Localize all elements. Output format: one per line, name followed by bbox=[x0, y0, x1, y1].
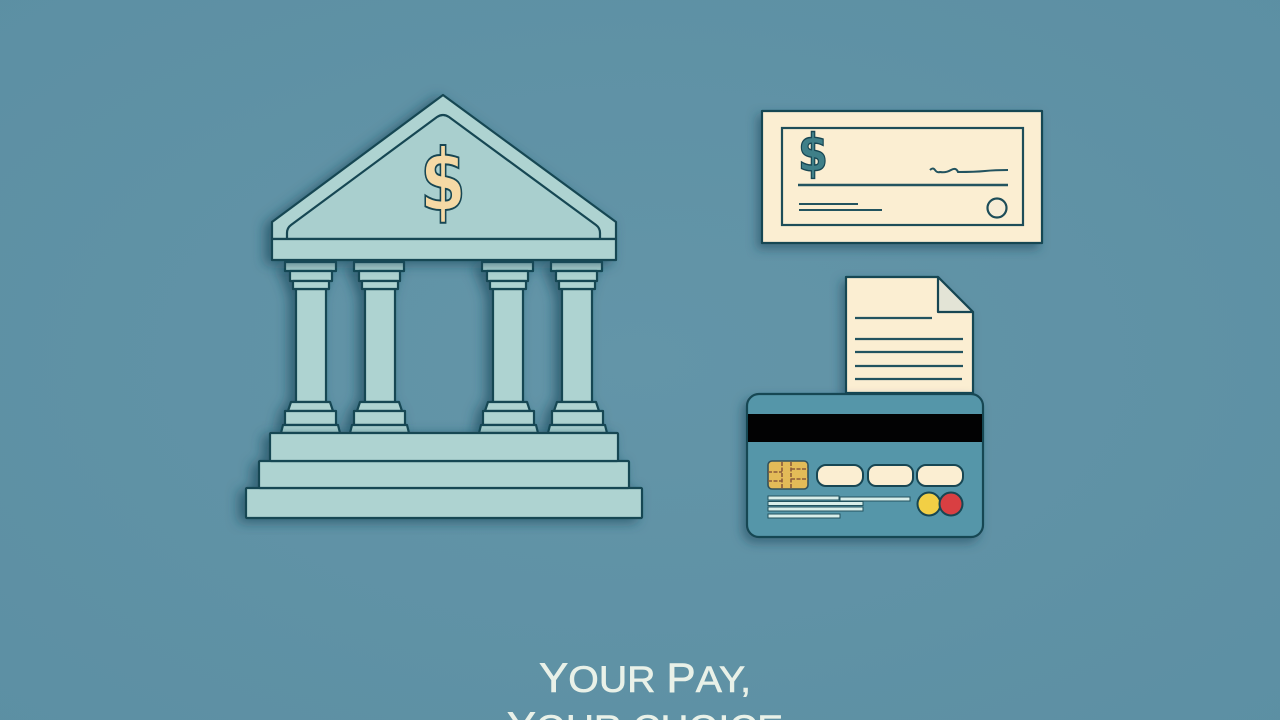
icon: dollar sign on pediment: $ bbox=[420, 131, 466, 231]
card chip bbox=[768, 461, 808, 489]
card logo circles bbox=[918, 492, 962, 516]
card magnetic stripe bbox=[748, 414, 982, 442]
document fold bbox=[938, 277, 973, 312]
title bbox=[507, 654, 783, 720]
column 4 bbox=[548, 262, 607, 433]
cheque dollar sign: $ bbox=[798, 124, 828, 184]
cheque paper bbox=[762, 111, 1042, 243]
document text lines bbox=[855, 318, 963, 379]
cheque amount line bbox=[798, 184, 1008, 186]
icon: cheque bbox=[762, 111, 1042, 243]
card text lines bbox=[768, 496, 910, 518]
bank steps bbox=[246, 433, 642, 518]
cheque memo lines bbox=[799, 204, 882, 210]
cheque seal bbox=[988, 198, 1006, 218]
column 3 bbox=[479, 262, 538, 433]
icon: bank card bbox=[747, 394, 983, 537]
icon: bank building bbox=[246, 95, 642, 518]
cheque signature bbox=[930, 168, 1008, 172]
cheque inner border bbox=[782, 128, 1023, 225]
bank roof bbox=[272, 95, 616, 260]
icon: document bbox=[846, 277, 973, 393]
column 1 bbox=[281, 262, 340, 433]
card number pills bbox=[817, 465, 963, 486]
document page bbox=[846, 277, 973, 393]
card body bbox=[747, 394, 983, 537]
bank columns bbox=[281, 262, 607, 433]
title line 1: YOUR PAY, bbox=[539, 654, 751, 701]
column 2 bbox=[350, 262, 409, 433]
